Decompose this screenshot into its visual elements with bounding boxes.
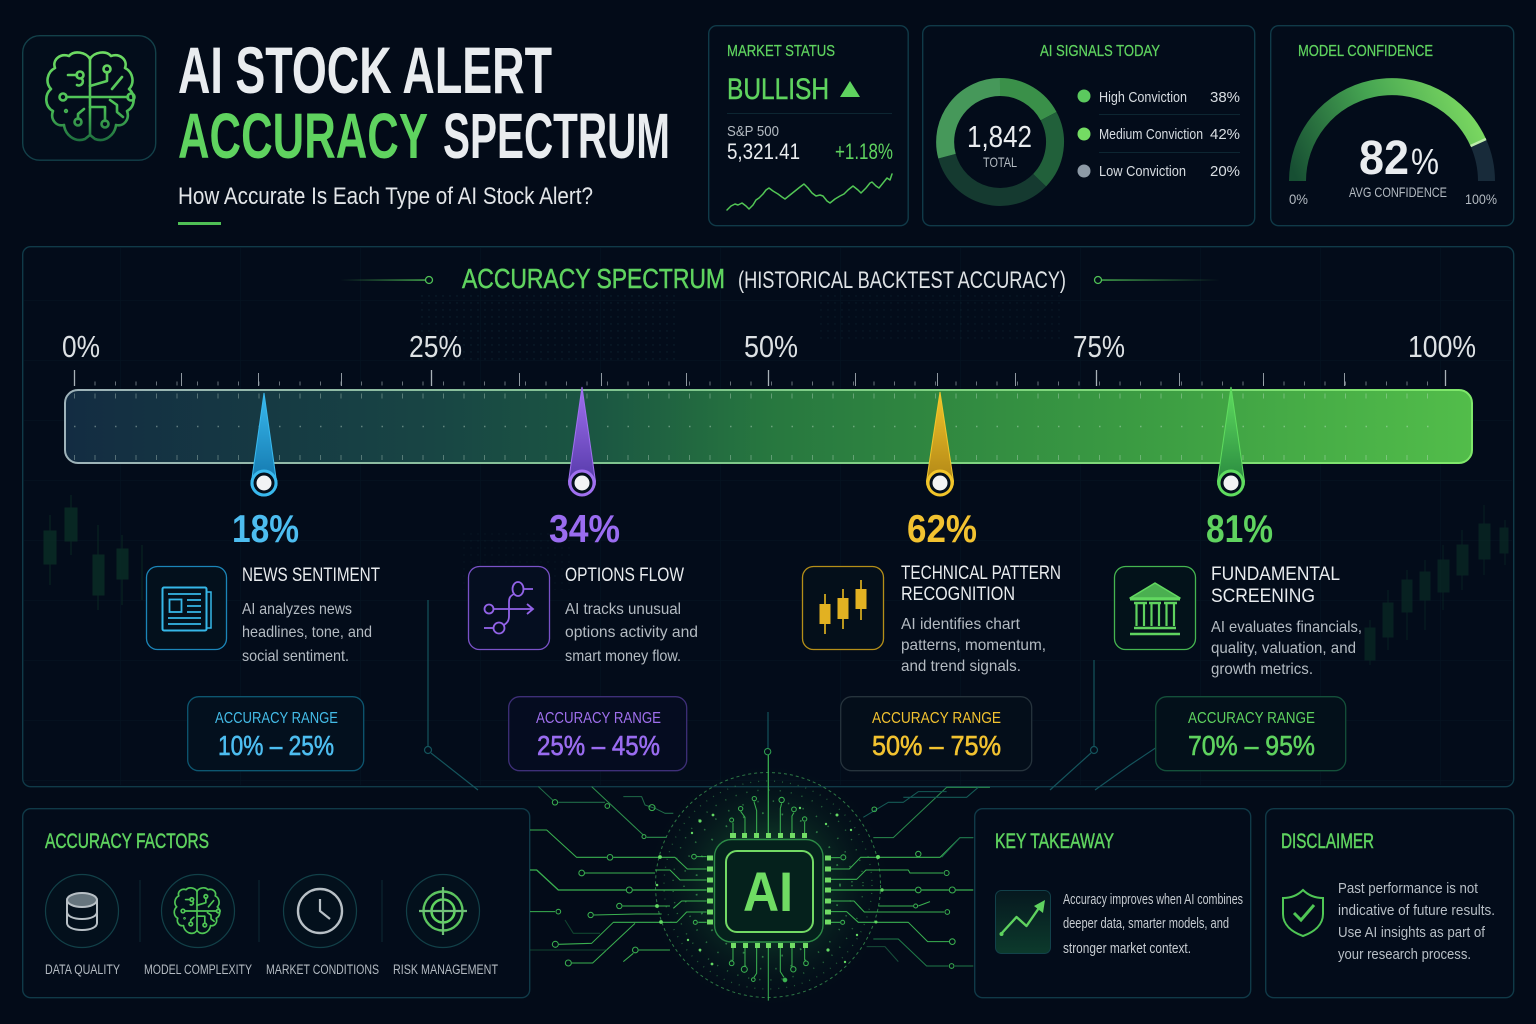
panel: disclaimer: Use AI insights as part of <box>1338 925 1486 941</box>
axis labels <box>62 329 1476 364</box>
card: fundamental screening <box>1114 563 1362 678</box>
card: technical pattern recognition <box>802 563 1061 675</box>
card: news sentiment: social sentiment. <box>242 648 349 665</box>
icon: newspaper <box>146 566 226 650</box>
panel: disclaimer: Past performance is not <box>1338 881 1478 897</box>
card: fundamental screening: FUNDAMENTAL <box>1211 563 1340 585</box>
accuracy range: fundamental screening: ACCURACY RANGE <box>1188 710 1315 727</box>
factor: data quality: DATA QUALITY <box>45 962 120 977</box>
panel: market status <box>709 26 908 226</box>
panel: market status: MARKET STATUS <box>727 43 835 60</box>
accuracy range: options flow: ACCURACY RANGE <box>536 710 661 727</box>
card: technical pattern recognition: AI identifies chart <box>901 616 1021 633</box>
panel: key takeaway: Accuracy improves when AI combines <box>1063 891 1243 908</box>
chip inner frame <box>726 851 813 932</box>
dotted globe <box>656 772 880 998</box>
card: news sentiment <box>146 565 380 665</box>
card: technical pattern recognition: TECHNICAL PATTERN <box>901 563 1061 584</box>
scattered nodes <box>655 807 884 965</box>
panel: market status: S&P 500 <box>727 123 779 140</box>
logo: brain icon tile <box>23 36 156 160</box>
heading: accuracy spectrum: (HISTORICAL BACKTEST ACCURACY) <box>738 267 1066 294</box>
circuit traces <box>530 748 990 1001</box>
factor: market conditions <box>266 874 379 977</box>
percent values: 81% <box>1206 508 1273 551</box>
percent values: 34% <box>549 508 620 551</box>
percent values <box>232 508 1273 551</box>
accuracy range: fundamental screening <box>1156 697 1346 771</box>
panel: market status: BULLISH <box>727 73 829 106</box>
accuracy range: technical pattern: 50% – 75% <box>872 730 1001 761</box>
subtitle <box>178 183 593 225</box>
card: news sentiment: NEWS SENTIMENT <box>242 565 380 586</box>
marker: fundamental screening 81% <box>1218 387 1244 495</box>
panel: accuracy spectrum <box>23 247 1514 790</box>
subtitle: How Accurate Is Each Type of AI Stock Alert? <box>178 183 593 210</box>
panel: accuracy factors <box>23 809 530 998</box>
chip outer body <box>714 840 823 942</box>
axis ticks <box>74 370 1446 386</box>
card: fundamental screening: AI evaluates financials, <box>1211 619 1362 636</box>
panel: key takeaway <box>975 809 1251 998</box>
icon: shield check <box>1283 890 1323 936</box>
panel: AI signals today: AI SIGNALS TODAY <box>1040 43 1160 60</box>
factor: risk management <box>393 874 498 977</box>
panel: model confidence: 0% <box>1289 191 1308 207</box>
panel: disclaimer: DISCLAIMER <box>1281 830 1374 853</box>
axis labels: 100% <box>1408 329 1476 364</box>
legend: High Conviction <box>1099 89 1187 106</box>
accuracy range: options flow: 25% – 45% <box>537 730 660 761</box>
card: options flow <box>468 565 698 665</box>
panel: model confidence <box>1271 26 1514 226</box>
gauge <box>1298 87 1486 181</box>
card: technical pattern recognition: patterns, momentum, <box>901 637 1046 654</box>
factor: model complexity <box>144 874 252 977</box>
factor: data quality <box>45 874 120 977</box>
icon: bank building <box>1114 566 1196 650</box>
icon: circuit brain <box>46 52 134 140</box>
legend: 38% <box>1210 89 1240 106</box>
accuracy range: news sentiment: ACCURACY RANGE <box>215 710 338 727</box>
legend: Low Conviction <box>1099 163 1186 180</box>
card: news sentiment: headlines, tone, and <box>242 624 372 641</box>
accuracy range: options flow <box>509 697 687 771</box>
panel: AI signals today <box>923 26 1255 226</box>
icon: rising chart <box>996 890 1050 954</box>
axis labels: 25% <box>409 329 462 364</box>
chip label: AI <box>743 860 793 923</box>
panel: key takeaway: deeper data, smarter models, and <box>1063 915 1229 932</box>
card: news sentiment: AI analyzes news <box>242 601 352 618</box>
title: ACCURACY <box>178 100 428 172</box>
card: technical pattern recognition: and trend signals. <box>901 658 1021 675</box>
accuracy range: fundamental screening: 70% – 95% <box>1188 730 1315 761</box>
panel: model confidence: 82 <box>1359 132 1409 185</box>
icon: up triangle <box>840 81 860 97</box>
panel: market status: 5,321.41 <box>727 139 800 164</box>
card: fundamental screening: SCREENING <box>1211 585 1315 607</box>
heading: accuracy spectrum <box>340 263 1220 294</box>
accuracy range: technical pattern: ACCURACY RANGE <box>872 710 1001 727</box>
panel: model confidence: MODEL CONFIDENCE <box>1298 43 1433 60</box>
card: options flow: OPTIONS FLOW <box>565 565 684 586</box>
accuracy range: news sentiment: 10% – 25% <box>218 730 334 761</box>
legend <box>1078 89 1240 180</box>
title: SPECTRUM <box>443 100 670 172</box>
legend: 42% <box>1210 126 1240 143</box>
icon: candlesticks <box>802 566 884 650</box>
heading: accuracy spectrum: ACCURACY SPECTRUM <box>462 263 725 294</box>
panel: model confidence: 100% <box>1465 191 1497 207</box>
panel: market status: +1.18% <box>835 139 893 164</box>
factor: risk management: RISK MANAGEMENT <box>393 962 498 977</box>
accuracy range: news sentiment <box>188 697 364 771</box>
panel: key takeaway: stronger market context. <box>1063 940 1191 957</box>
title <box>178 33 670 172</box>
factor: market conditions: MARKET CONDITIONS <box>266 962 379 977</box>
panel: disclaimer: your research process. <box>1338 947 1471 963</box>
panel: AI signals today: 1,842 <box>967 119 1032 154</box>
marker: news sentiment 18% <box>251 393 277 496</box>
card: fundamental screening: quality, valuation, and <box>1211 640 1356 657</box>
panel: accuracy factors: ACCURACY FACTORS <box>45 830 209 853</box>
factor: model complexity: MODEL COMPLEXITY <box>144 962 252 977</box>
background candlesticks left <box>44 495 142 610</box>
legend: 20% <box>1210 163 1240 180</box>
card: options flow: smart money flow. <box>565 648 681 665</box>
legend: Medium Conviction <box>1099 126 1203 143</box>
panel: key takeaway: KEY TAKEAWAY <box>995 830 1114 853</box>
spectrum bar <box>65 390 1472 463</box>
sparkline <box>727 174 892 210</box>
donut chart <box>945 87 1055 197</box>
panel: disclaimer: indicative of future results. <box>1338 903 1495 919</box>
background candlesticks right <box>1365 505 1508 665</box>
marker: options flow 34% <box>568 387 596 495</box>
panel: AI signals today: TOTAL <box>983 154 1017 170</box>
panel: disclaimer <box>1266 809 1514 998</box>
accuracy range: technical pattern <box>841 697 1032 771</box>
connector traces <box>424 600 1160 790</box>
card: fundamental screening: growth metrics. <box>1211 661 1313 678</box>
card: technical pattern recognition: RECOGNITION <box>901 584 1015 605</box>
card: options flow: options activity and <box>565 624 698 641</box>
chip pins <box>707 833 831 948</box>
axis labels: 0% <box>62 329 100 364</box>
panel: model confidence: % <box>1411 141 1439 182</box>
axis labels: 50% <box>744 329 798 364</box>
AI chip with circuit globe <box>530 748 990 1005</box>
icon: branching flow <box>468 566 550 650</box>
percent values: 62% <box>907 508 977 551</box>
panel: model confidence: AVG CONFIDENCE <box>1349 184 1447 200</box>
card: options flow: AI tracks unusual <box>565 601 681 618</box>
title: AI STOCK ALERT <box>178 33 552 107</box>
percent values: 18% <box>232 508 299 551</box>
axis labels: 75% <box>1073 329 1125 364</box>
marker: technical pattern 62% <box>926 392 953 495</box>
